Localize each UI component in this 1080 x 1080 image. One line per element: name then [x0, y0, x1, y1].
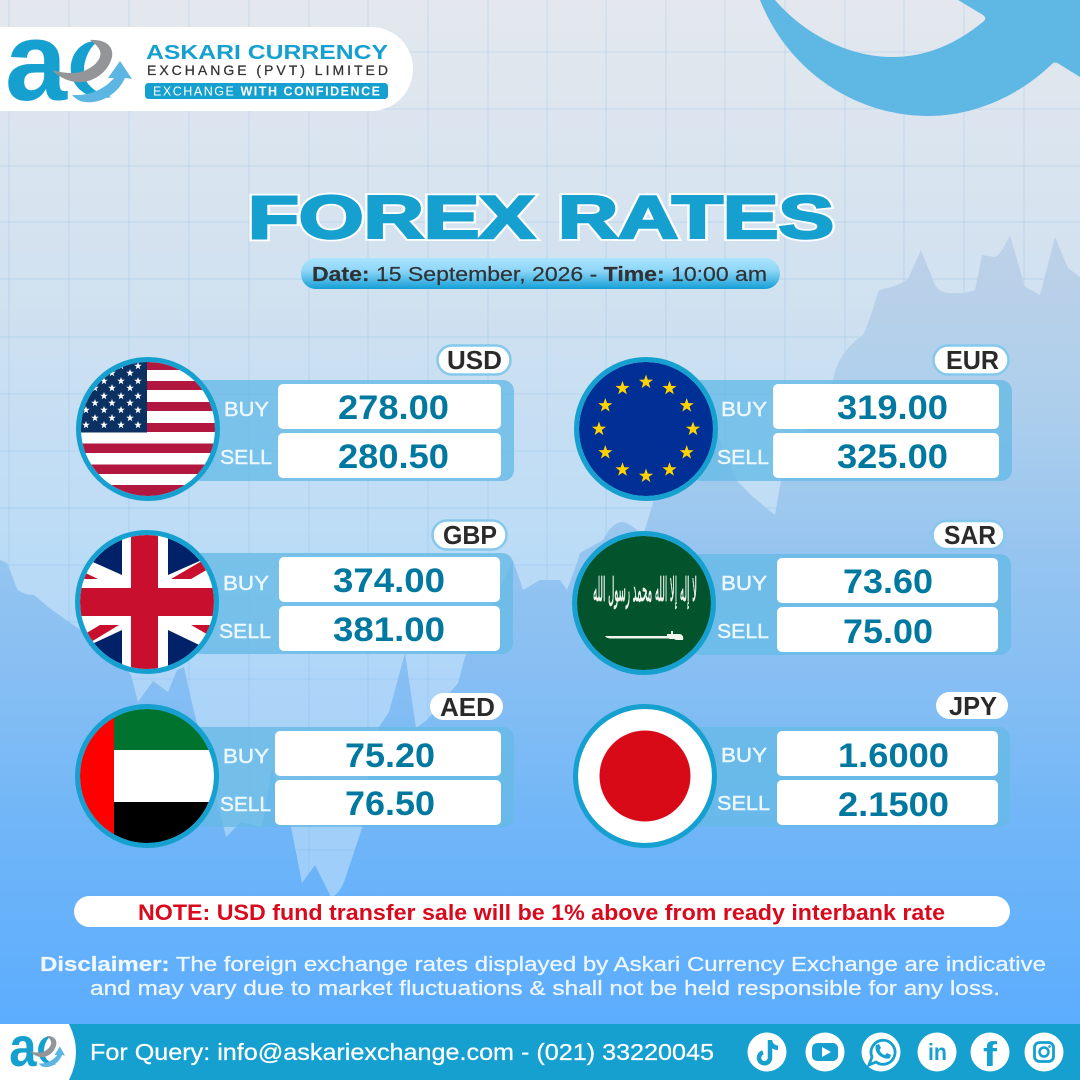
panel: SAR: لا إله إلا الله محمد رسول الله — [593, 570, 697, 610]
buy rate box — [777, 731, 998, 776]
date pill — [301, 258, 780, 289]
footer logo: a — [9, 1016, 37, 1079]
company subtitle: EXCHANGE (PVT) LIMITED — [147, 62, 388, 78]
buy rate box — [773, 384, 999, 429]
rate panel background — [190, 380, 514, 481]
logo banner — [0, 0, 413, 124]
icon: LinkedIn — [918, 1032, 956, 1072]
buy value: 278.00 — [338, 389, 449, 427]
buy label: BUY — [721, 745, 767, 767]
sell rate box — [777, 607, 998, 652]
sell value: 76.50 — [345, 785, 435, 823]
sell value: 2.1500 — [838, 786, 949, 824]
buy value: 75.20 — [345, 737, 435, 775]
contact text: For Query: info@askariexchange.com - (021) 33220045 — [90, 1039, 714, 1065]
icon: LinkedIn: in — [928, 1039, 947, 1065]
note bar — [74, 896, 1010, 927]
sword — [605, 631, 683, 640]
disclaimer: Disclaimer: The foreign exchange rates displayed by Askari Currency Exchange are indicative — [40, 953, 1046, 976]
buy label: BUY — [223, 746, 269, 768]
sell value: 381.00 — [333, 611, 445, 649]
panel: AED — [78, 692, 514, 848]
sell label: SELL — [717, 793, 770, 815]
company name: ASKARI CURRENCY — [146, 42, 389, 64]
flag: UAE — [78, 706, 219, 848]
currency tag: GBP — [443, 520, 497, 550]
sell label: SELL — [219, 621, 271, 643]
rate panel background — [690, 727, 1010, 827]
icon: TikTok — [748, 1032, 786, 1072]
buy value: 73.60 — [843, 563, 933, 601]
sell value: 280.50 — [338, 438, 449, 476]
sell rate box — [279, 606, 500, 651]
title heavy overlay: FOREX RATES — [248, 184, 834, 251]
sell label: SELL — [717, 621, 769, 643]
panel: GBP — [75, 520, 513, 672]
buy value: 319.00 — [837, 389, 948, 427]
buy rate box — [275, 731, 501, 776]
sell label: SELL — [220, 447, 272, 469]
currency tag: AED — [440, 692, 495, 722]
logo mark: a — [5, 0, 68, 124]
currency tag: USD — [447, 345, 502, 375]
buy label: BUY — [721, 399, 767, 421]
sell label: SELL — [220, 794, 271, 816]
date pill: Date: 15 September, 2026 - Time: 10:00 am — [312, 264, 767, 286]
currency tag: SAR — [944, 520, 996, 550]
rate panel background — [190, 553, 513, 654]
top-right decorative arrow swoosh — [760, 0, 1080, 116]
icon: YouTube — [806, 1032, 844, 1072]
panel: JPY — [576, 691, 1010, 846]
disclaimer: and may vary due to market fluctuations & shall not be held responsible for any loss. — [90, 977, 1000, 1000]
disclaimer — [40, 953, 1046, 1000]
currency tag: JPY — [949, 691, 997, 721]
rate panel background — [690, 554, 1011, 655]
footer bar — [0, 1016, 1080, 1080]
icon: Instagram — [1024, 1032, 1064, 1072]
sell rate box — [275, 780, 501, 825]
buy label: BUY — [223, 573, 269, 595]
note bar: NOTE: USD fund transfer sale will be 1% above from ready interbank rate — [138, 900, 945, 925]
footer logo — [9, 1016, 65, 1079]
buy label: BUY — [721, 573, 767, 595]
flag: UK — [75, 532, 222, 672]
rate panel background — [190, 727, 514, 827]
sell rate box — [278, 433, 501, 478]
icon: WhatsApp — [862, 1032, 900, 1072]
sell value: 75.00 — [843, 613, 933, 651]
buy value: 1.6000 — [838, 737, 949, 775]
buy label: BUY — [224, 399, 269, 421]
buy rate box — [279, 557, 500, 602]
panel: EUR — [576, 345, 1012, 498]
icon: Facebook — [970, 1032, 1010, 1074]
sell rate box — [777, 780, 998, 825]
rate panel background — [690, 380, 1012, 481]
icon: Facebook: f — [983, 1036, 998, 1074]
flag: Saudi Arabia — [574, 534, 714, 672]
panel: SAR — [574, 520, 1011, 672]
flag: USA — [78, 360, 218, 498]
sell value: 325.00 — [837, 438, 948, 476]
buy value: 374.00 — [333, 562, 445, 600]
panel: USD — [78, 345, 514, 498]
sell label: SELL — [717, 447, 769, 469]
currency tag: EUR — [946, 345, 999, 375]
logo mark — [5, 0, 132, 124]
flag: Japan — [576, 706, 714, 846]
sell rate box — [773, 433, 999, 478]
title: FOREX RATES — [248, 184, 834, 251]
tagline: EXCHANGE WITH CONFIDENCE — [153, 84, 380, 98]
buy rate box — [777, 558, 998, 603]
buy rate box — [278, 384, 501, 429]
currency tag — [936, 691, 1008, 721]
flag: EU — [576, 360, 716, 498]
